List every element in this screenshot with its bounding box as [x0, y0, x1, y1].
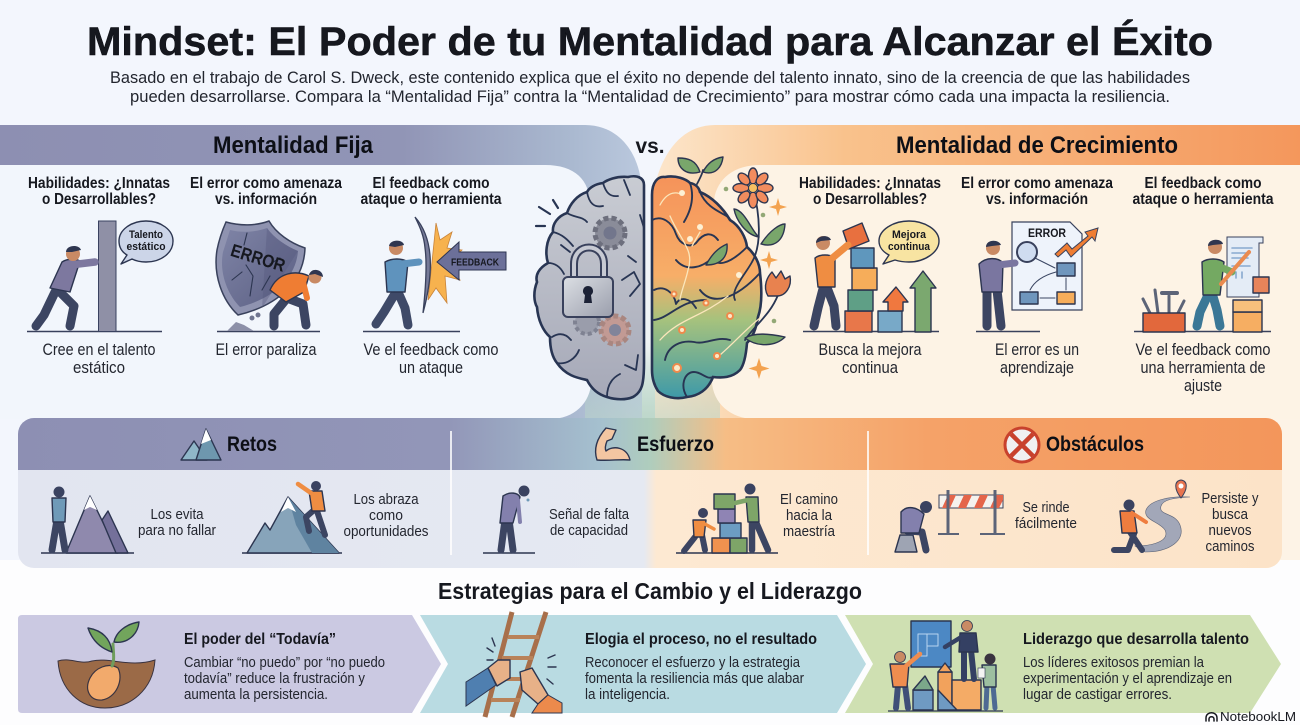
column: error: El error como amenaza [190, 175, 342, 192]
item: senal de falta [483, 486, 630, 553]
icon: person with tools and plans [1134, 237, 1271, 332]
icon: brain divided [534, 157, 790, 399]
icon: person at winding road [1114, 480, 1190, 552]
icon: blocked circle [1005, 428, 1039, 462]
icon: person blocking feedback arrow [363, 217, 506, 332]
item: el camino: hacia la [786, 507, 833, 524]
text: liderazgo: experimentación y el aprendizaje en [1023, 671, 1232, 687]
column: feedback crecimiento [1132, 175, 1274, 395]
column: habilidades: Habilidades: ¿Innatas [28, 175, 170, 192]
item: los abraza: como [369, 507, 403, 524]
heading: esfuerzo [596, 428, 714, 460]
item: senal de falta: de capacidad [550, 522, 628, 539]
text: el poder del todavia: Cambiar “no puedo” por “no puedo [184, 655, 385, 671]
heading: mentalidad de crecimiento: Mentalidad de Crecimiento [896, 132, 1178, 159]
icon: person sitting at barrier [895, 490, 1005, 552]
item: persiste: nuevos [1208, 522, 1252, 539]
panel: mentalidad de crecimiento [712, 132, 1300, 419]
column: error: El error paraliza [216, 340, 317, 359]
callout: mejora continua: continua [888, 241, 931, 253]
item: persiste: busca [1212, 506, 1249, 523]
panel: comparison table [18, 418, 1282, 568]
text: el poder del todavia [184, 631, 385, 703]
icon: flexed arm [596, 428, 630, 460]
text: elogia el proceso: Reconocer el esfuerzo y la estrategia [585, 655, 801, 671]
column: habilidades crecimiento: o Desarrollables? [813, 191, 927, 208]
item: persiste [1114, 480, 1259, 555]
icon: shield carried by person: ERROR [228, 240, 288, 276]
item: senal de falta: Señal de falta [549, 506, 630, 523]
text: elogia el proceso: Elogia el proceso, no el resultado [585, 631, 817, 648]
icon: person avoiding mountain [41, 486, 134, 553]
gear icons [575, 218, 629, 344]
icon: hands on ladder [466, 612, 562, 717]
column: error crecimiento: vs. información [986, 191, 1088, 208]
text: liderazgo [1023, 631, 1249, 703]
callout: talento estatico: estático [126, 241, 166, 253]
item: el camino: maestría [783, 523, 836, 540]
column: habilidades crecimiento: Habilidades: ¿Innatas [799, 175, 941, 192]
panel: strategy liderazgo [845, 615, 1281, 713]
item: persiste: Persiste y [1202, 490, 1259, 507]
text: elogia el proceso [585, 631, 817, 703]
icon: person analysing error document: ERROR [1028, 228, 1067, 240]
column: feedback [360, 175, 506, 377]
text: liderazgo: Liderazgo que desarrolla talento [1023, 631, 1249, 648]
column: habilidades crecimiento [799, 175, 941, 377]
icon: shield carried by person [216, 221, 323, 332]
column: habilidades: Cree en el talento [42, 340, 156, 359]
text: el poder del todavia: todavía” reduce la frustración y [184, 671, 366, 687]
label: vs: vs. [636, 135, 664, 158]
column: error crecimiento: aprendizaje [1000, 358, 1074, 377]
item: los abraza [242, 481, 428, 553]
item: el camino: El camino [780, 491, 838, 508]
column: feedback crecimiento: ajuste [1184, 376, 1222, 395]
icon: seed sprouting [58, 622, 155, 708]
icon: person pushing pillar [27, 221, 162, 332]
text: liderazgo: lugar de castigar errores. [1023, 687, 1172, 703]
column: habilidades crecimiento: continua [842, 358, 898, 377]
column: feedback crecimiento: Ve el feedback como [1136, 340, 1270, 359]
heading: retos [181, 429, 277, 460]
logo: notebooklm: NotebookLM [1220, 709, 1296, 724]
heading: obstaculos [1005, 428, 1144, 462]
panel: strategy todavia [18, 615, 441, 713]
text: elogia el proceso: la inteligencia. [585, 687, 670, 703]
column: feedback crecimiento: El feedback como [1144, 175, 1262, 192]
column: habilidades: o Desarrollables? [42, 191, 156, 208]
icon: drooping person [483, 486, 535, 553]
column: feedback: Ve el feedback como [364, 340, 498, 359]
icon: climber on mountain [242, 481, 342, 553]
item: los evita [41, 486, 216, 553]
column: error crecimiento: El error como amenaza [961, 175, 1113, 192]
column: habilidades crecimiento: Busca la mejora [818, 340, 922, 359]
text: liderazgo: Los líderes exitosos premian la [1023, 655, 1205, 671]
icon: tension marks [536, 200, 558, 226]
callout: mejora continua: Mejora [892, 229, 927, 241]
text: el poder del todavia: El poder del “Todavía” [184, 631, 336, 648]
icon: team with blueprint [888, 620, 1003, 711]
column: feedback crecimiento: una herramienta de [1140, 358, 1266, 377]
item: se rinde [895, 490, 1077, 552]
column: feedback crecimiento: ataque o herramienta [1132, 191, 1274, 208]
subtitle: Basado en el trabajo de Carol S. Dweck, este contenido explica que el éxito no depende del talento innato, sino de la creencia de que las habilidades [110, 69, 1190, 87]
item: los abraza: oportunidades [344, 523, 428, 540]
icon: person analysing error document [976, 222, 1098, 332]
column: feedback: un ataque [399, 358, 463, 377]
panel: backdrop bands [0, 125, 1300, 418]
item: se rinde: fácilmente [1015, 515, 1077, 532]
text: elogia el proceso: fomenta la resiliencia más que alabar [585, 671, 804, 687]
subtitle [110, 69, 1190, 106]
heading: esfuerzo: Esfuerzo [637, 433, 714, 456]
item: los abraza: Los abraza [354, 491, 419, 508]
column: feedback: ataque o herramienta [360, 191, 502, 208]
column: error crecimiento [961, 175, 1113, 377]
panel: strategy elogia [420, 612, 866, 717]
column: error: vs. información [215, 191, 317, 208]
item: los evita: Los evita [150, 506, 204, 523]
callout: talento estatico [119, 221, 173, 264]
heading: mentalidad fija: Mentalidad Fija [213, 132, 374, 159]
text: el poder del todavia: aumenta la persistencia. [184, 687, 328, 703]
right hemisphere: colourful growth [652, 176, 761, 398]
heading: obstaculos: Obstáculos [1046, 433, 1144, 456]
item: persiste: caminos [1206, 538, 1254, 555]
callout: mejora continua [879, 221, 939, 264]
column: feedback: El feedback como [372, 175, 490, 192]
item: los evita: para no fallar [138, 522, 216, 539]
column: error [190, 175, 342, 359]
subtitle: pueden desarrollarse. Compara la “Mentalidad Fija” contra la “Mentalidad de Crecimiento” para mostrar cómo cada una impacta la resiliencia. [130, 88, 1170, 106]
column: error crecimiento: El error es un [995, 340, 1079, 359]
icon: builders stacking blocks [676, 484, 778, 553]
heading: retos: Retos [227, 433, 277, 456]
icon: person blocking feedback arrow: FEEDBACK [451, 256, 499, 268]
icon: mountains [181, 429, 221, 460]
heading: estrategias: Estrategias para el Cambio y el Liderazgo [438, 578, 862, 604]
left hemisphere: cracked stone [534, 176, 644, 399]
icon: flowers and leaves [678, 157, 790, 379]
icon: person stacking blocks with arrows [803, 223, 939, 332]
panel: mentalidad fija [0, 132, 592, 419]
item: se rinde: Se rinde [1022, 499, 1070, 516]
column: habilidades [27, 175, 173, 377]
item: el camino [676, 484, 838, 553]
icon: padlock [563, 248, 613, 317]
title: Mindset: El Poder de tu Mentalidad para Alcanzar el Éxito [87, 19, 1213, 64]
callout: talento estatico: Talento [129, 229, 163, 241]
column: habilidades: estático [73, 358, 125, 377]
